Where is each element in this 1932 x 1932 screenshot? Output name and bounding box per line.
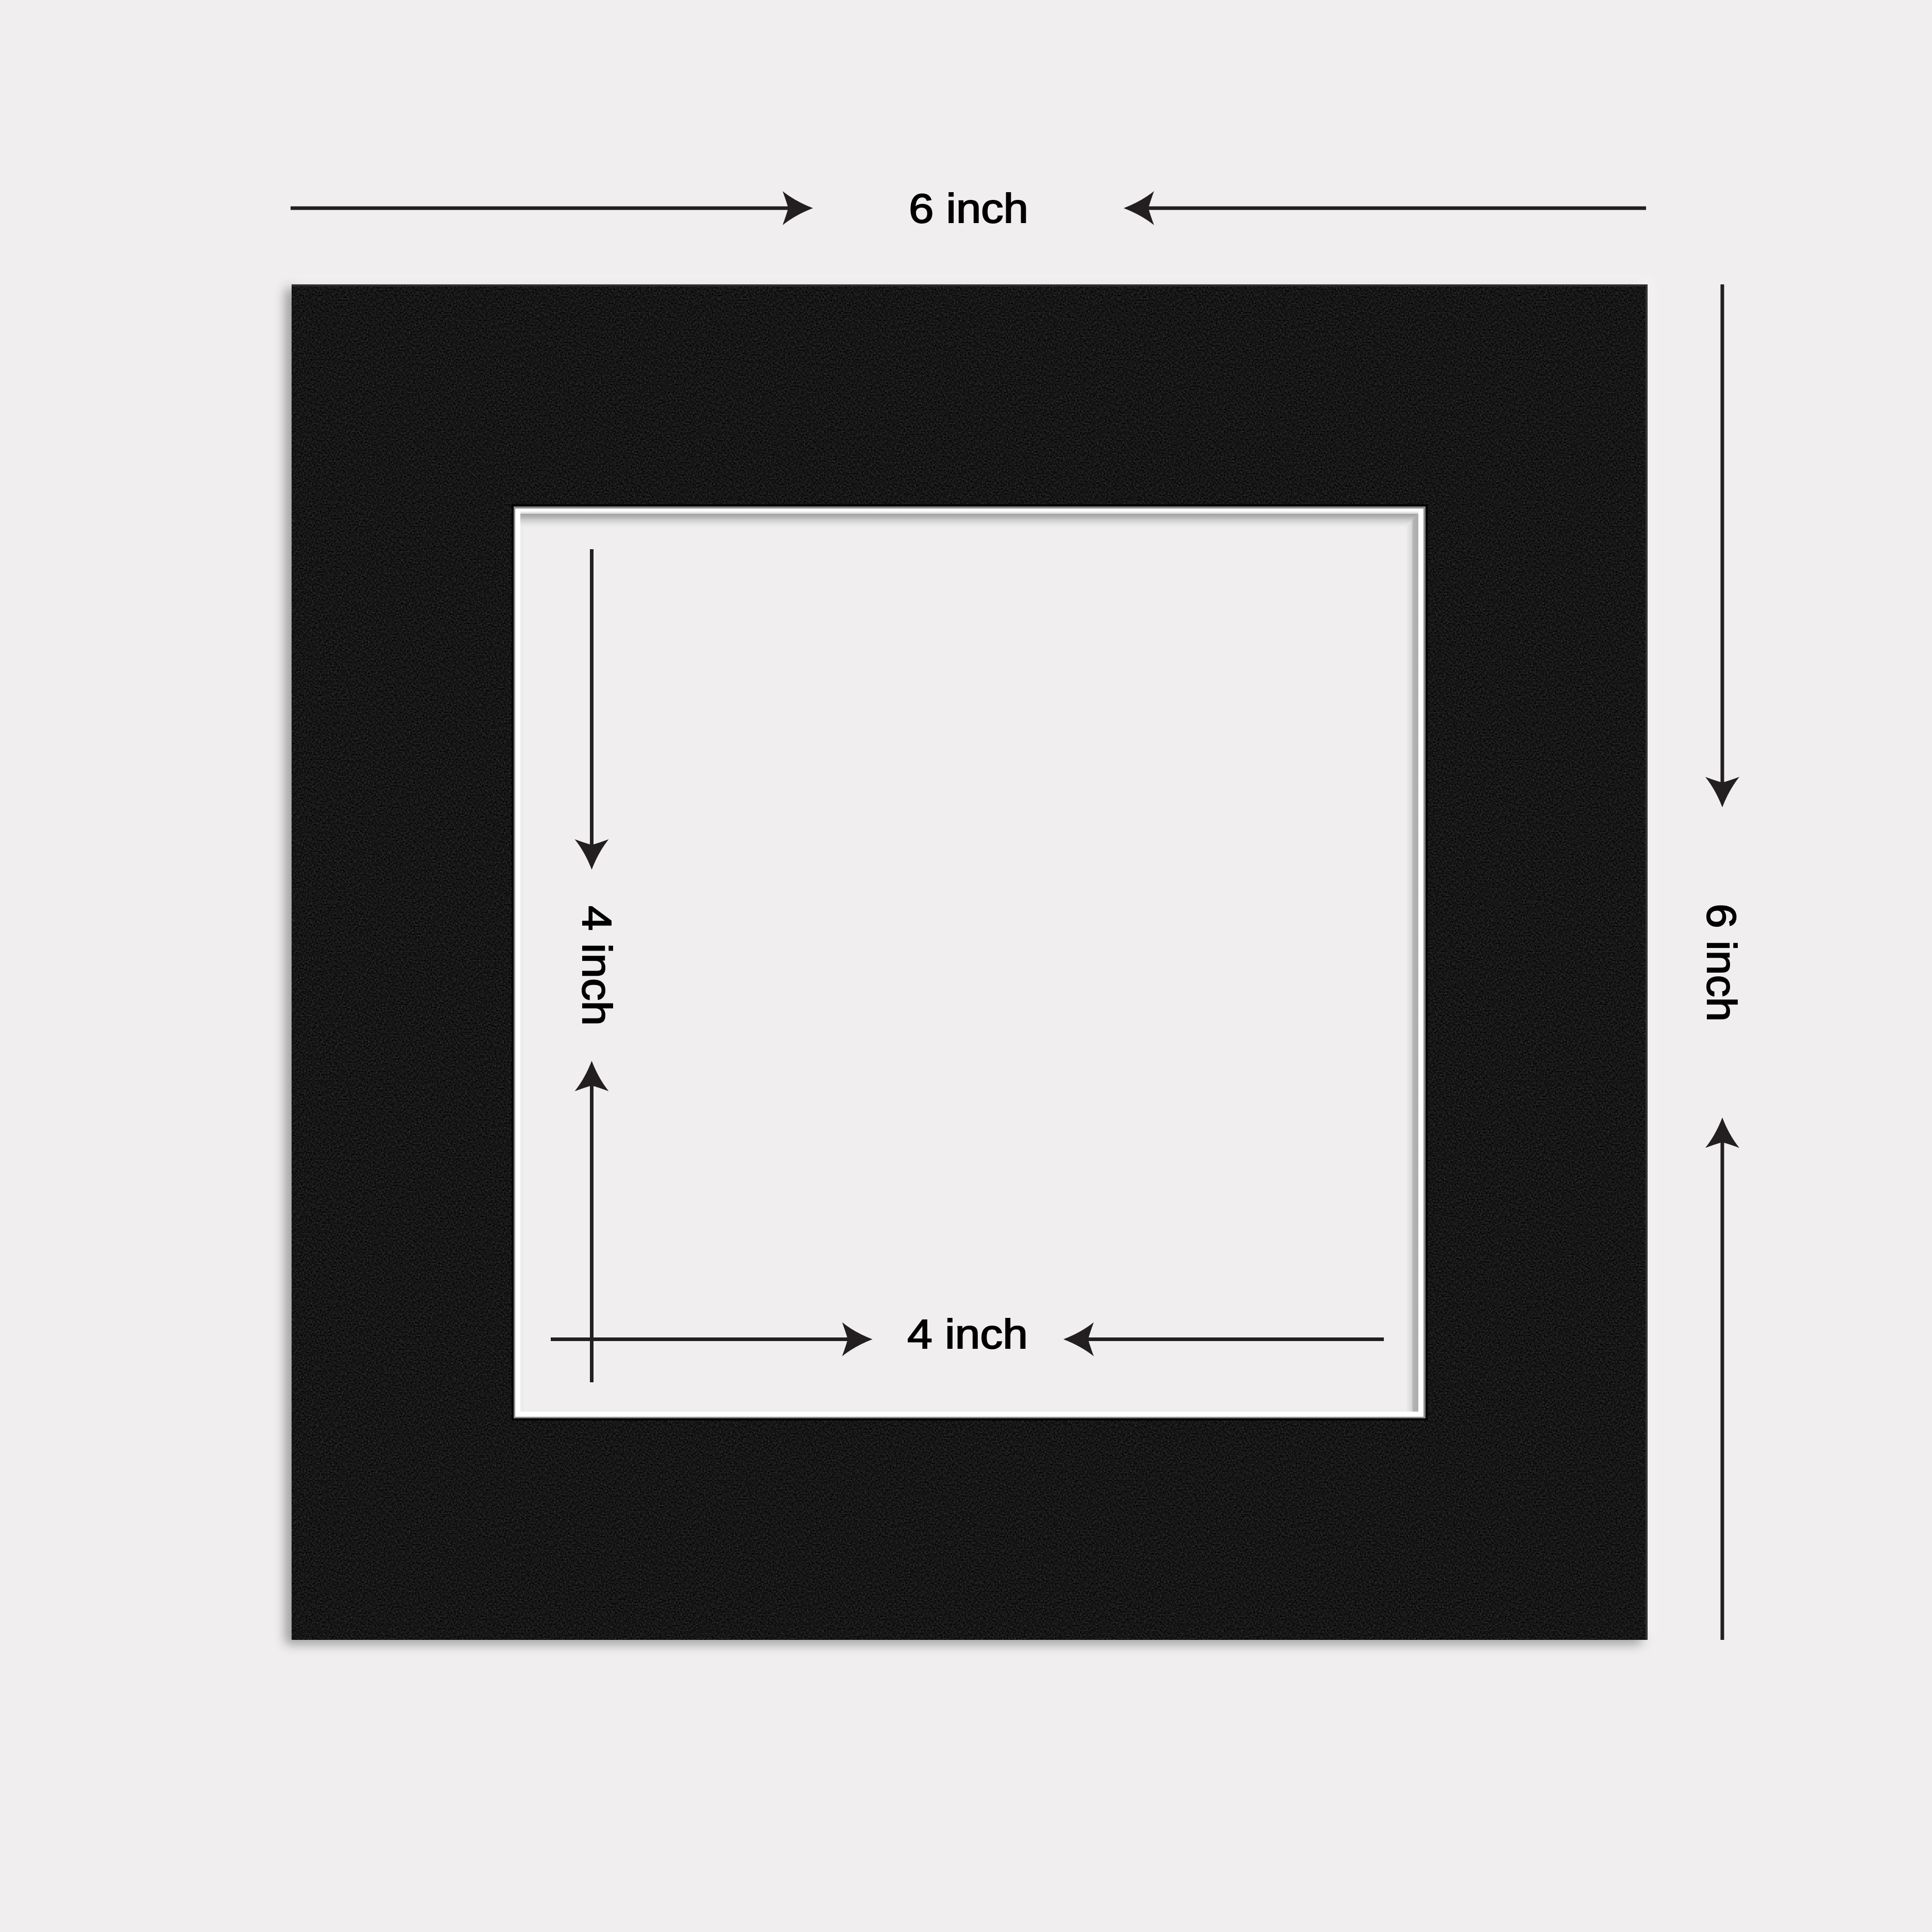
dimension: inner bottom 4 inch	[551, 1311, 1384, 1357]
arrow: top right	[1124, 191, 1646, 225]
arrow: right up	[1705, 1117, 1739, 1640]
label: inner bottom 4 inch: 4 inch	[907, 1311, 1028, 1357]
label: right 6 inch: 6 inch	[1699, 904, 1744, 1022]
arrow: inner bottom right	[1063, 1322, 1384, 1356]
label: top 6 inch: 6 inch	[909, 185, 1028, 231]
panel: window opening	[512, 504, 1428, 1420]
arrow: inner left down	[575, 549, 609, 870]
arrow: top left	[291, 191, 813, 225]
dimension: top 6 inch	[291, 185, 1646, 231]
arrow: inner bottom left	[551, 1322, 873, 1356]
label: inner left 4 inch: 4 inch	[574, 906, 620, 1026]
dimension: inner left 4 inch	[574, 549, 620, 1382]
panel: black mat board	[285, 280, 1652, 1644]
arrow: inner left up	[575, 1061, 609, 1382]
arrow: right down	[1705, 284, 1739, 807]
dimension: right 6 inch	[1699, 284, 1744, 1640]
